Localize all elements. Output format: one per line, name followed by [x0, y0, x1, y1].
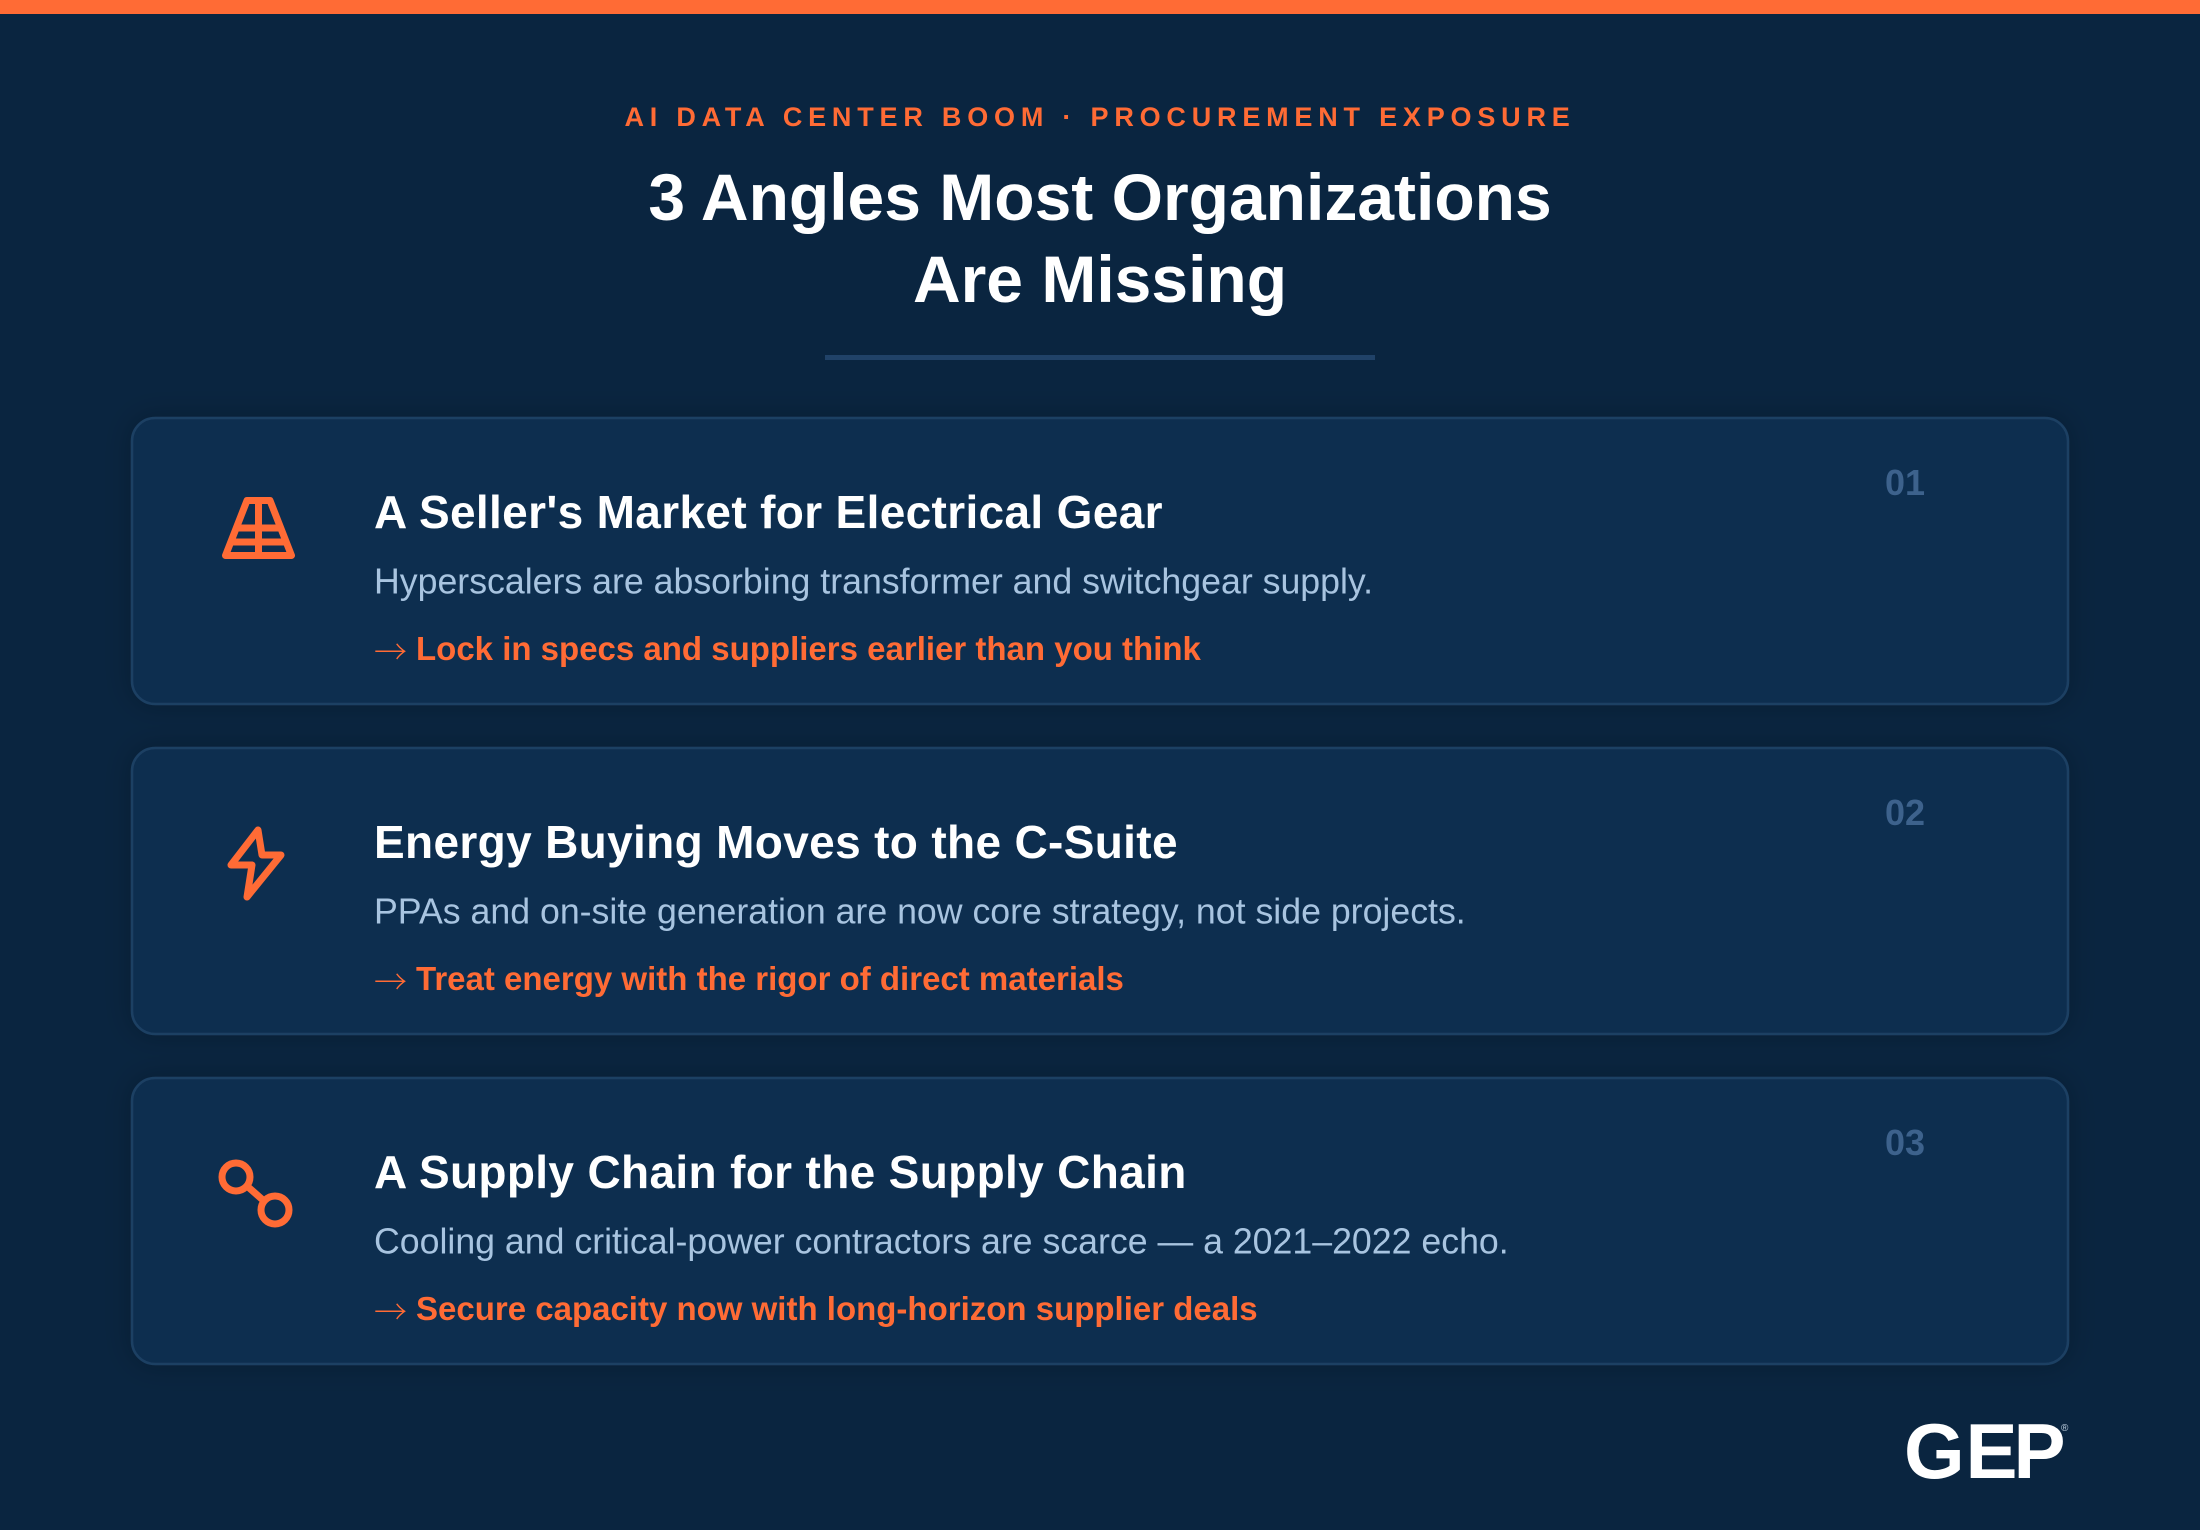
GEP logo: GEP	[1904, 1407, 2066, 1495]
arrow: →	[374, 1287, 407, 1334]
card 1 description: Hyperscalers are absorbing transformer and switchgear supply.	[374, 562, 1373, 602]
icon: lightning bolt	[231, 830, 281, 897]
card 1 number: 01	[1885, 462, 1925, 503]
arrow: →	[374, 957, 407, 1004]
card 3 heading: A Supply Chain for the Supply Chain	[374, 1146, 1187, 1198]
title: 3 Angles Most Organizations	[648, 160, 1552, 234]
card 3 description: Cooling and critical-power contractors are scarce — a 2021–2022 echo.	[374, 1222, 1509, 1262]
card 3 action: Secure capacity now with long-horizon supplier deals	[416, 1290, 1258, 1327]
card 1 action: Lock in specs and suppliers earlier than you think	[416, 630, 1202, 667]
card 2 action: Treat energy with the rigor of direct materials	[416, 960, 1124, 997]
card 1 heading: A Seller's Market for Electrical Gear	[374, 486, 1163, 538]
title divider	[825, 355, 1375, 360]
arrow: →	[374, 627, 407, 674]
title	[648, 160, 1552, 316]
card 2 description: PPAs and on-site generation are now core strategy, not side projects.	[374, 892, 1466, 932]
icon: transformer tower	[226, 500, 292, 556]
GEP logo: ®	[2061, 1423, 2069, 1434]
icon: linked nodes	[222, 1163, 289, 1224]
card 3 number: 03	[1885, 1122, 1925, 1163]
panel: card 2	[132, 748, 2068, 1034]
top accent bar	[0, 0, 2200, 14]
panel: card 1	[132, 418, 2068, 704]
title: Are Missing	[913, 242, 1287, 316]
panel: card 3	[132, 1078, 2068, 1364]
card 2 heading: Energy Buying Moves to the C-Suite	[374, 816, 1178, 868]
eyebrow: AI DATA CENTER BOOM · PROCUREMENT EXPOSURE	[624, 102, 1576, 132]
card 2 number: 02	[1885, 792, 1925, 833]
